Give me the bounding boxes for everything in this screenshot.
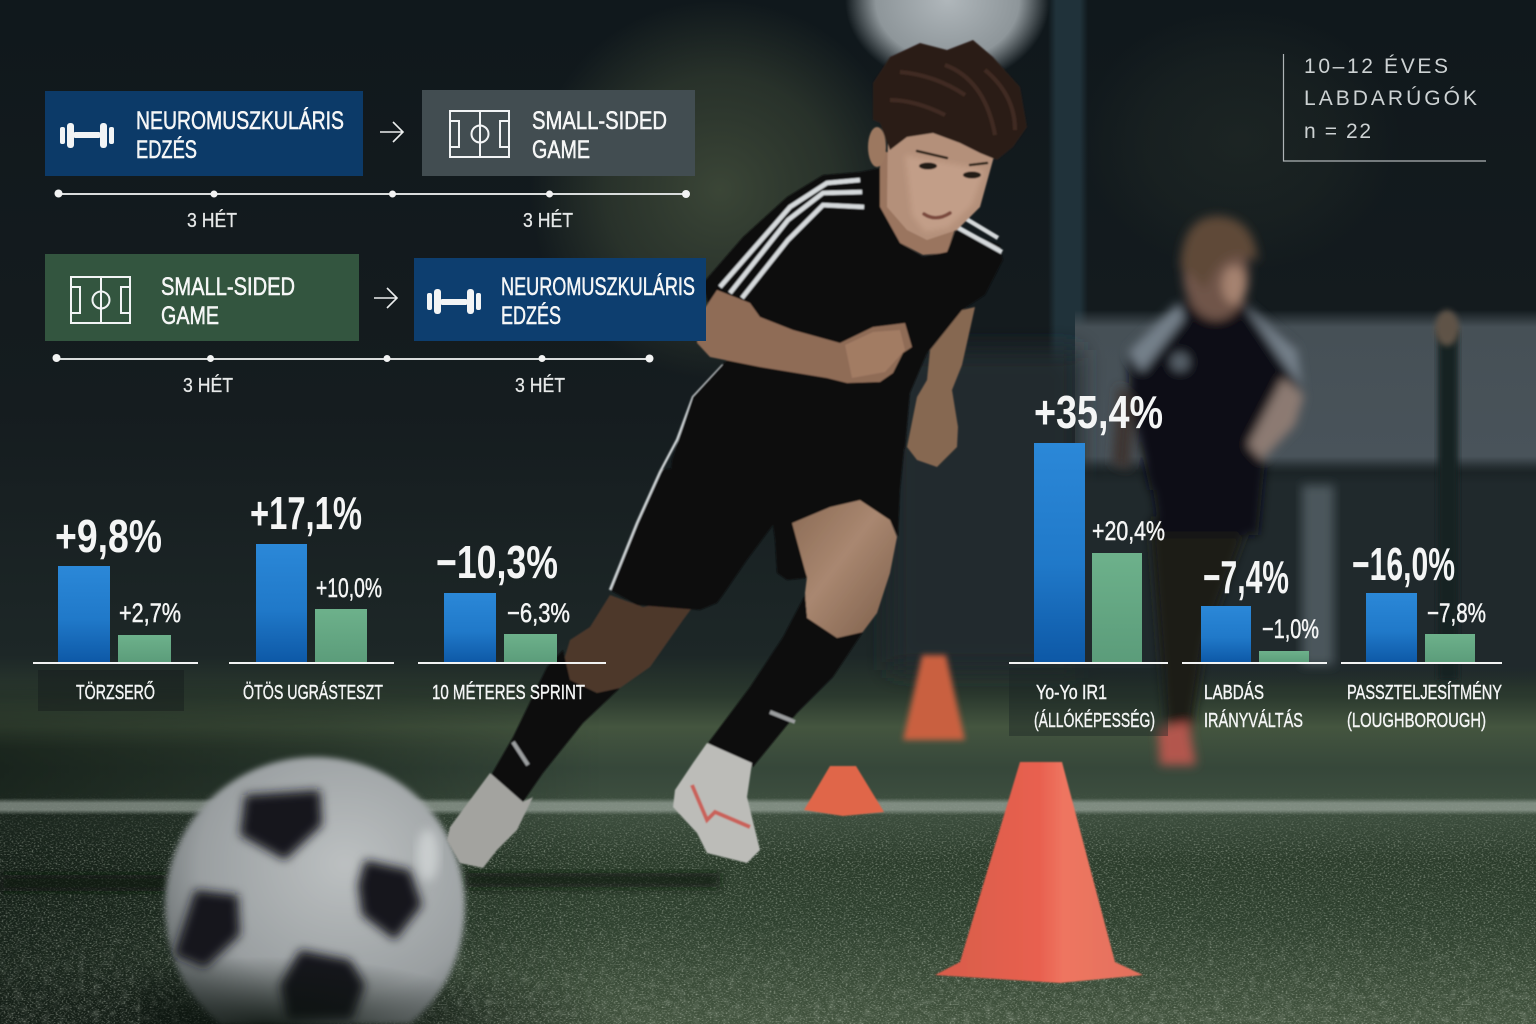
chart: Yo-Yo IR1 endurance: +35,4% — [1034, 386, 1163, 438]
box: neuromuscular training — [414, 258, 706, 341]
label: 3 weeks: 3 HÉT — [183, 374, 233, 397]
right thigh and knee — [792, 500, 897, 638]
face — [887, 120, 1000, 240]
chart: core strength — [33, 510, 198, 711]
sock logos — [513, 712, 795, 765]
neck — [880, 150, 960, 255]
chart: 10 metre sprint: 10 MÉTERES SPRINT — [432, 681, 585, 704]
icon: pitch — [71, 277, 130, 323]
chart: passing performance — [1341, 538, 1502, 732]
shirt — [670, 168, 1003, 478]
chart: five-jump test: +17,1% — [250, 487, 362, 539]
chart: change of direction with ball: −7,4% — [1203, 551, 1289, 603]
panel: sequence 2, small-sided game then neuromuscular — [45, 254, 706, 397]
left boot — [447, 773, 533, 868]
box: small-sided game: GAME — [532, 136, 590, 164]
info: age group and sample size: 10–12 ÉVES — [1304, 55, 1448, 78]
arrow: sequence 1 — [380, 122, 403, 142]
boot swoosh — [692, 785, 750, 827]
icon: dumbbell — [427, 289, 481, 314]
chart: passing performance: −16,0% — [1352, 538, 1455, 590]
chart: 10 metre sprint: −10,3% — [436, 536, 558, 588]
timeline: sequence 2 — [52, 354, 654, 362]
face light — [905, 155, 985, 232]
box: small-sided game — [422, 90, 695, 176]
box: small-sided game: SMALL-SIDED — [161, 273, 295, 301]
facial features — [917, 151, 987, 218]
hair highlights — [890, 65, 1015, 135]
icon: pitch — [450, 111, 509, 157]
panel: sequence 1, neuromuscular then small-sided game — [45, 90, 695, 232]
left thigh — [563, 595, 700, 693]
icon: dumbbell — [60, 123, 114, 148]
left arm and fist — [697, 290, 912, 383]
label: 3 weeks: 3 HÉT — [187, 209, 237, 232]
chart: five-jump test: ÖTÖS UGRÁSTESZT — [243, 681, 383, 704]
box: neuromuscular training — [45, 91, 363, 176]
chart: five-jump test — [229, 487, 394, 704]
chart: five-jump test: +10,0% — [316, 573, 382, 603]
large foreground cone — [935, 762, 1143, 983]
box: neuromuscular training: NEUROMUSZKULÁRIS — [501, 272, 695, 301]
info: age group and sample size: LABDARÚGÓK — [1304, 87, 1477, 110]
blurred distant cone — [903, 655, 965, 740]
chart: 10 metre sprint: −6,3% — [507, 598, 570, 628]
chart: change of direction with ball — [1182, 551, 1327, 732]
chart: passing performance: −7,8% — [1427, 598, 1486, 628]
timeline: sequence 1 — [54, 190, 690, 198]
chart: passing performance: (LOUGHBOROUGH) — [1347, 709, 1486, 732]
info: age group and sample size — [1284, 54, 1486, 161]
info: age group and sample size: n = 22 — [1304, 120, 1371, 143]
box: neuromuscular training: EDZÉS — [501, 301, 561, 330]
chart: core strength: +9,8% — [55, 510, 162, 562]
box: small-sided game: SMALL-SIDED — [532, 107, 667, 135]
main player running — [447, 40, 1027, 868]
chart: 10 metre sprint — [418, 536, 606, 704]
blurred soccer ball — [140, 757, 500, 1024]
blurred background player — [1112, 216, 1304, 765]
hair — [873, 40, 1027, 160]
box: small-sided game: GAME — [161, 302, 219, 330]
right arm and hand — [907, 307, 975, 467]
label: 3 weeks: 3 HÉT — [523, 209, 573, 232]
shirt stripes — [720, 180, 1002, 298]
box: small-sided game — [45, 254, 359, 341]
box: neuromuscular training: EDZÉS — [136, 135, 197, 164]
chart: Yo-Yo IR1 endurance: (ÁLLÓKÉPESSÉG) — [1034, 709, 1155, 732]
right sock — [708, 595, 863, 767]
chart: Yo-Yo IR1 endurance — [1009, 386, 1168, 736]
left sock — [490, 650, 620, 802]
right boot — [673, 743, 760, 863]
ear — [868, 127, 886, 167]
label: 3 weeks: 3 HÉT — [515, 374, 565, 397]
arrow: sequence 2 — [374, 288, 397, 308]
chart: Yo-Yo IR1 endurance: Yo-Yo IR1 — [1036, 681, 1107, 704]
chart: change of direction with ball: LABDÁS — [1204, 681, 1264, 704]
chart: Yo-Yo IR1 endurance: +20,4% — [1092, 516, 1165, 546]
chart: change of direction with ball: IRÁNYVÁLTÁS — [1204, 709, 1303, 732]
fist highlight — [845, 330, 905, 378]
chart: core strength: +2,7% — [119, 598, 181, 628]
shorts side stripe — [610, 365, 723, 590]
chart: core strength: TÖRZSERŐ — [76, 681, 155, 704]
box: neuromuscular training: NEUROMUSZKULÁRIS — [136, 106, 344, 135]
small cone — [804, 766, 884, 816]
shorts — [610, 440, 905, 610]
chart: change of direction with ball: −1,0% — [1262, 614, 1319, 644]
